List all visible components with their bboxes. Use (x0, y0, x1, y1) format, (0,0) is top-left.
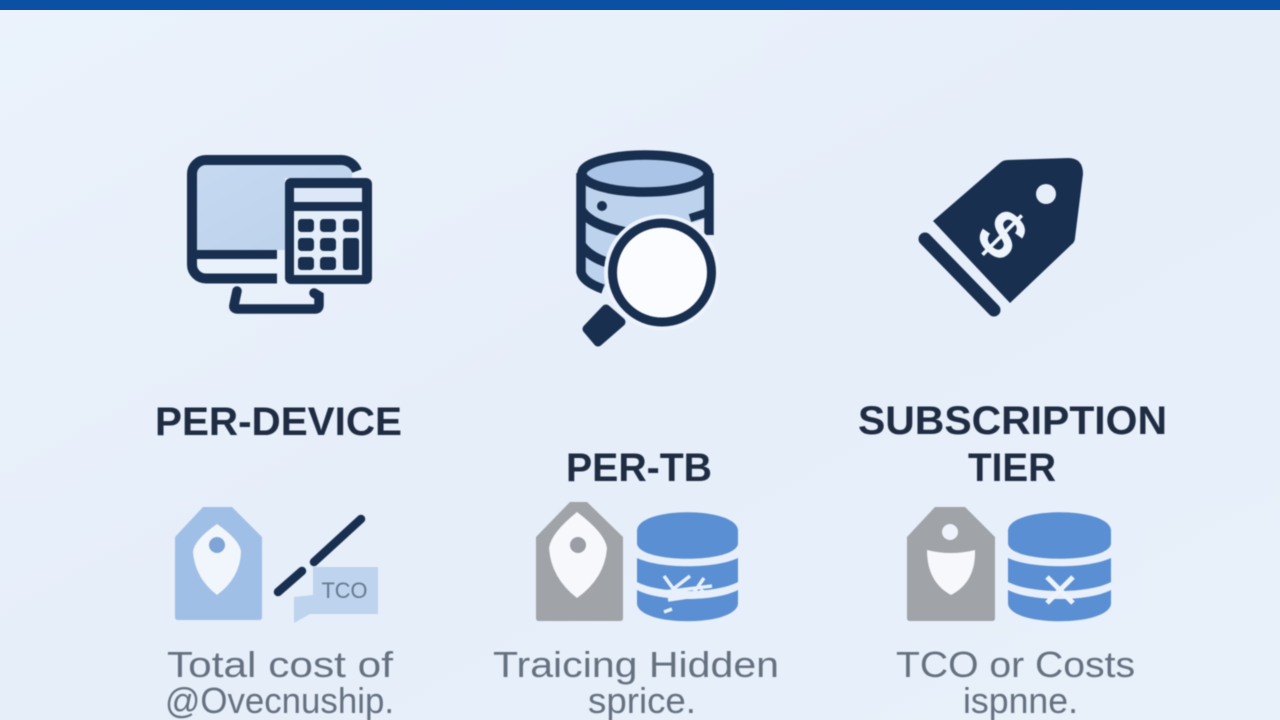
icon: database with magnifier (581, 155, 720, 342)
caption: total cost: Total cost of (167, 644, 394, 685)
icon: monitor with calculator (192, 160, 372, 309)
icon: grey tag and database with cross (907, 507, 1111, 621)
caption: hidden: Traicing Hidden (493, 644, 779, 685)
heading: per-TB: PER-TB (566, 446, 712, 490)
caption: second line: ispnne. (963, 680, 1078, 720)
caption: TCO or costs: TCO or Costs (896, 644, 1135, 685)
panel: per-device (155, 160, 402, 720)
icon: dollar price tag: $ (962, 194, 1043, 275)
icon: price tag and TCO slash: TCO (322, 578, 368, 603)
icon: price tag and TCO slash (175, 507, 378, 623)
heading: tier: TIER (968, 446, 1056, 490)
caption: second line: @Ovecnuship. (165, 680, 394, 720)
icon: grey tag and database (536, 502, 738, 621)
heading: per-device: PER-DEVICE (155, 400, 402, 444)
caption: second line: sprice. (588, 680, 696, 720)
panel: per-TB (493, 155, 779, 720)
heading: subscription: SUBSCRIPTION (858, 399, 1167, 443)
icon: dollar price tag (925, 158, 1083, 310)
panel: subscription tier (858, 158, 1167, 720)
top bar (0, 0, 1280, 10)
